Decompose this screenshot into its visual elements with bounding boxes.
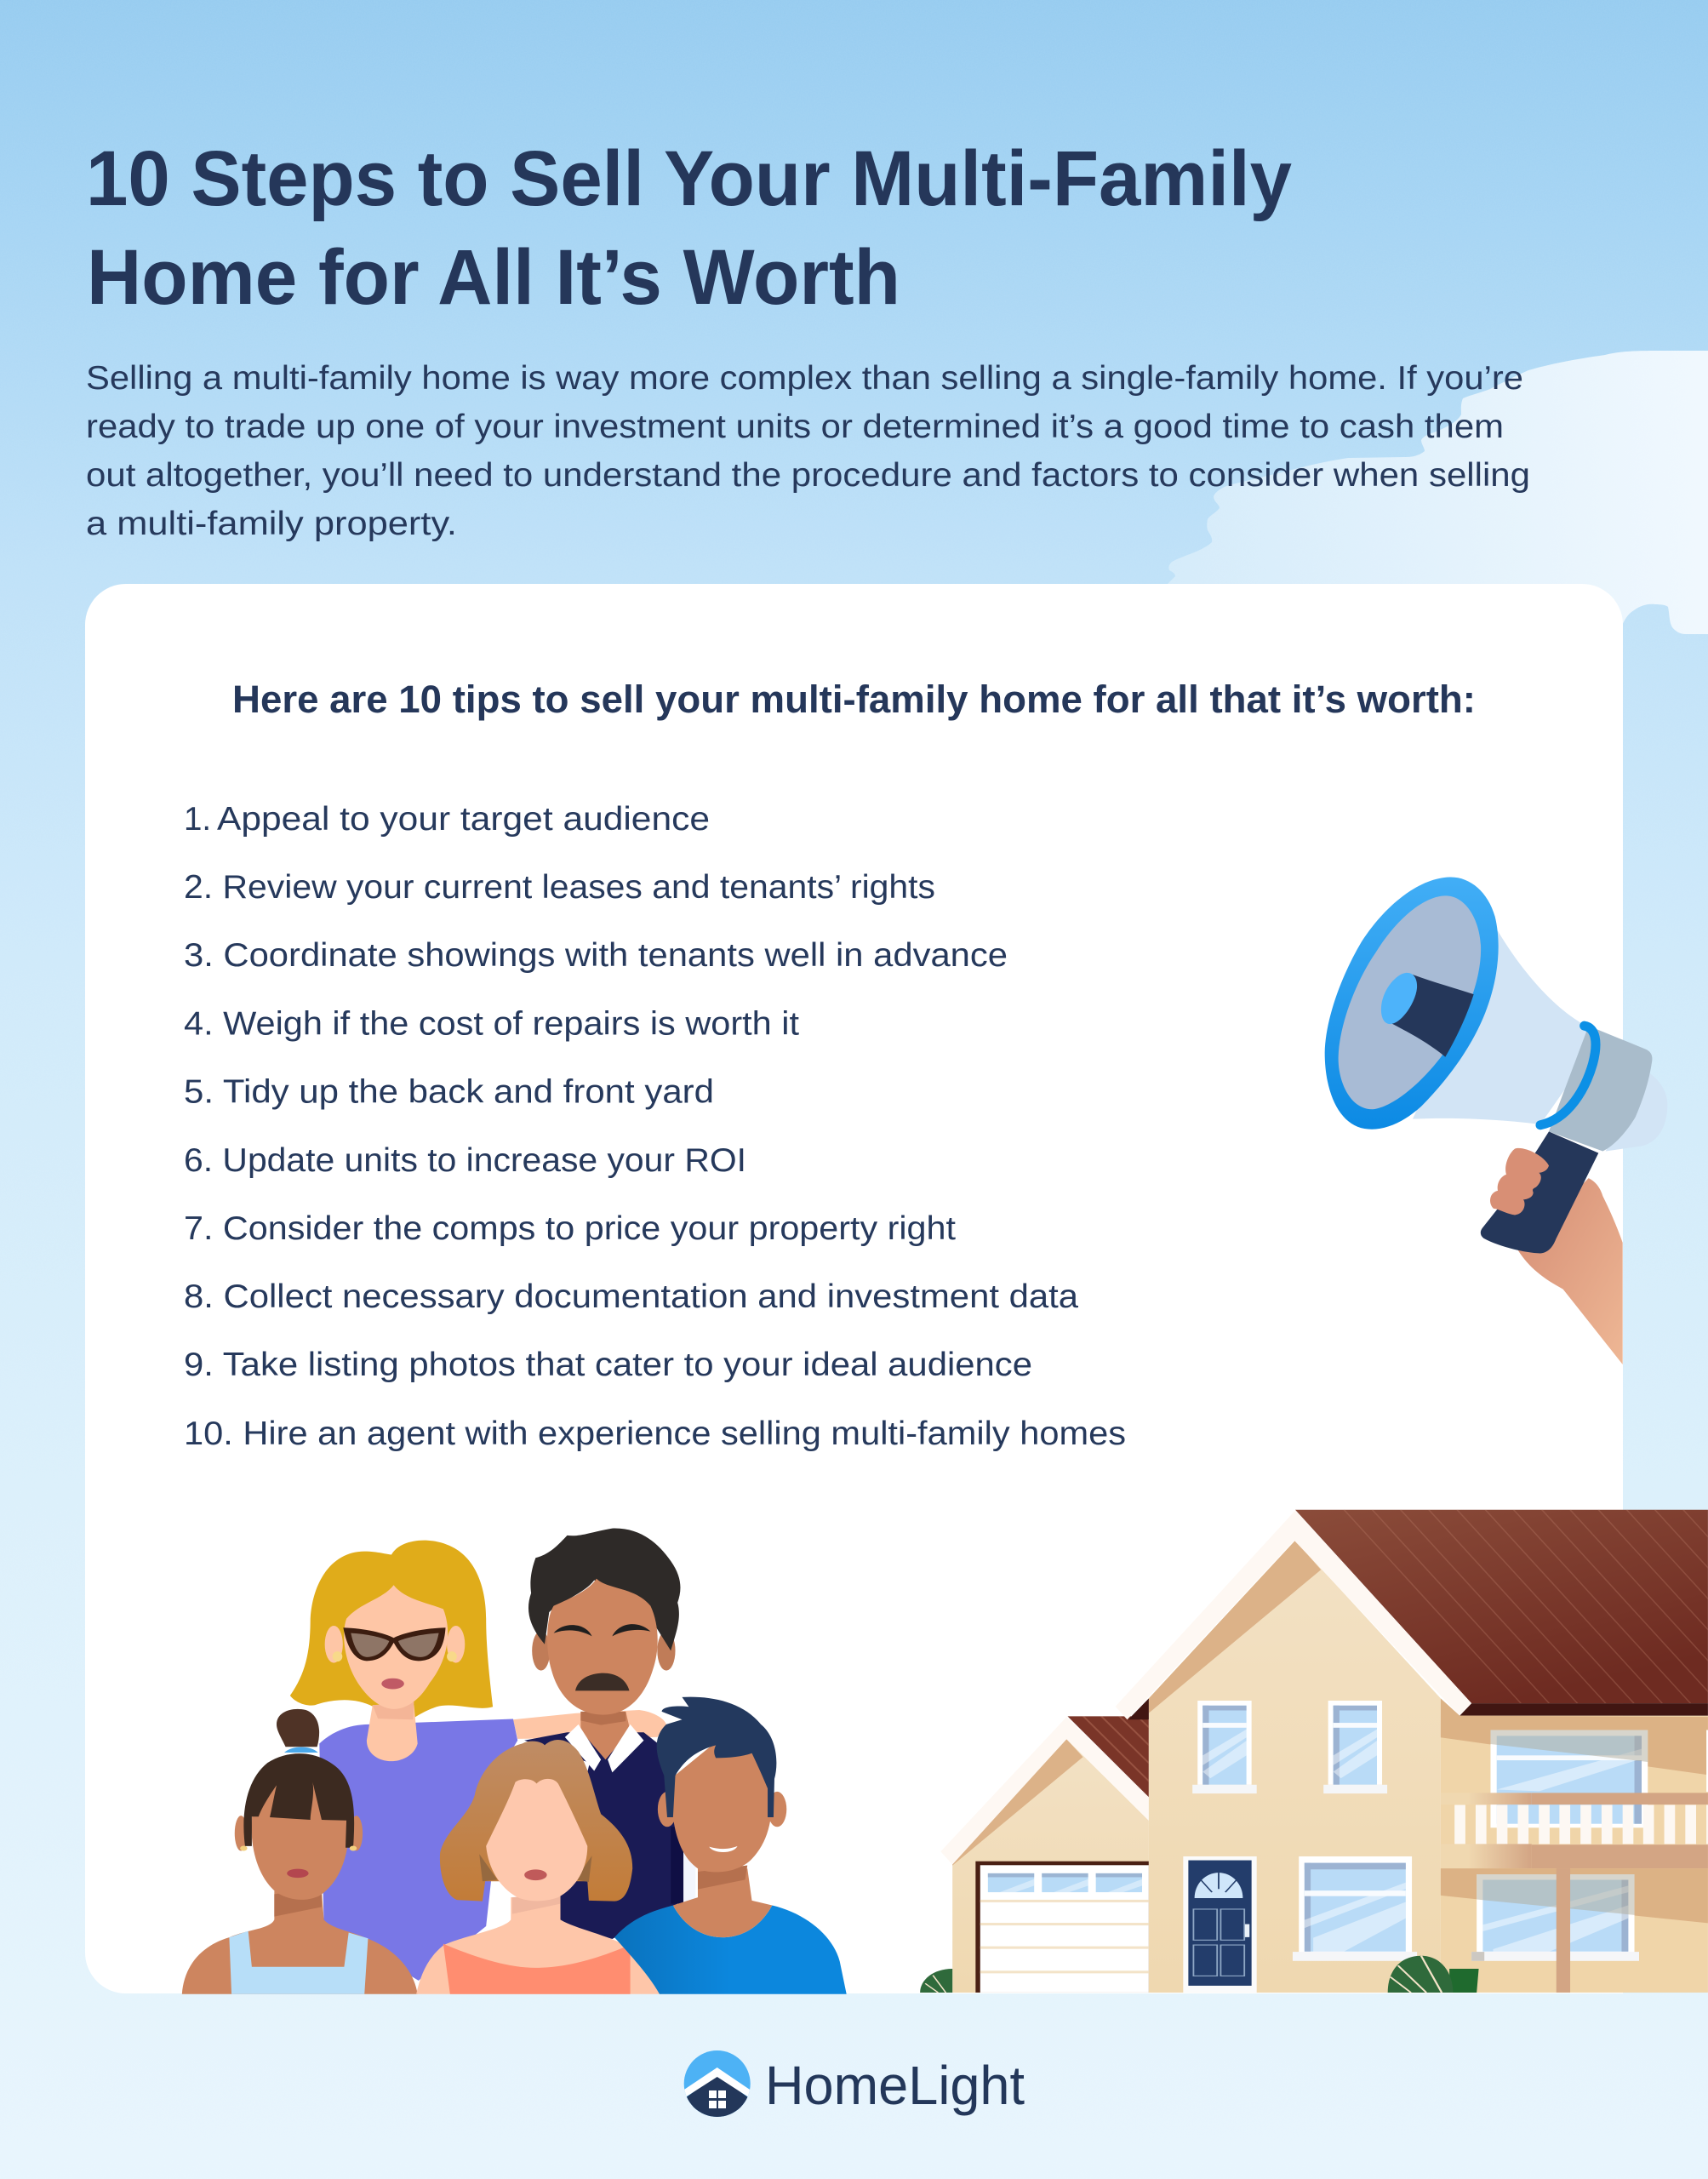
house: right wing wall [1441,1716,1708,1993]
list: ten tips: 1. [184,801,211,838]
icon: bush by front window [1388,1956,1479,1993]
list: ten tips: 2. Review your current leases and tenants’ rights [184,869,935,906]
logo: HomeLight [684,2050,1025,2117]
person: girl with hair bun [182,1709,418,1994]
title: 10 Steps to Sell Your Multi-Family [86,135,1292,222]
list: ten tips: 4. Weigh if the cost of repairs is worth it [184,1006,799,1042]
title [86,135,1292,321]
intro paragraph: out altogether, you’ll need to understand the procedure and factors to consider when selling [86,457,1530,494]
list: ten tips: Appeal to your target audience [217,801,710,838]
house: front door [1183,1856,1257,1993]
list: ten tips: 3. Coordinate showings with tenants well in advance [184,937,1008,974]
house: wing lower shadow [1441,1868,1708,1923]
house: lower right window [1471,1874,1639,1961]
list: ten tips: 6. Update units to increase your ROI [184,1142,746,1179]
panel: white tips card [85,584,1623,1993]
logo icon: house in circle [684,2050,751,2117]
house: balcony window [1490,1730,1648,1827]
house: main gable wall [1149,1541,1441,1993]
person: woman with auburn hair [416,1740,662,1994]
title: Home for All It’s Worth [87,234,900,321]
icon: bush by garage [920,1969,952,1993]
house: balcony [1441,1793,1708,1868]
logo: HomeLight: HomeLight [765,2055,1025,2116]
list: ten tips [184,801,1126,1452]
list: ten tips: 10. Hire an agent with experience selling multi-family homes [184,1415,1126,1452]
person: man with mustache [524,1529,695,1939]
house: lower middle window [1293,1856,1417,1961]
house: upper middle window [1323,1701,1387,1793]
house: upper left window [1192,1701,1257,1793]
intro paragraph [86,360,1530,542]
background: cloud [1164,351,1708,634]
house: porch post [1557,1868,1570,1993]
list: ten tips: 8. Collect necessary documentation and investment data [184,1278,1079,1315]
heading: tips intro: Here are 10 tips to sell your multi-family home for all that it’s worth: [232,678,1476,721]
intro paragraph: a multi-family property. [86,506,457,542]
person: smiling man in blue shirt [614,1697,847,1994]
list: ten tips: 5. Tidy up the back and front yard [184,1074,714,1110]
illustration: house [920,1510,1708,1993]
list: ten tips: 7. Consider the comps to price your property right [184,1210,956,1247]
house: wing upper shadow [1441,1698,1708,1775]
house: main roof [1116,1510,1708,1719]
icon: megaphone held by hand [1325,877,1667,1364]
illustration: group of five people [182,1529,847,1994]
list: ten tips: 9. Take listing photos that cater to your ideal audience [184,1347,1032,1383]
person: blonde woman with sunglasses [290,1541,666,1981]
house: garage wing [941,1716,1149,1993]
intro paragraph: ready to trade up one of your investment units or determined it’s a good time to cash them [86,409,1504,445]
intro paragraph: Selling a multi-family home is way more complex than selling a single-family home. If you’re [86,360,1523,397]
